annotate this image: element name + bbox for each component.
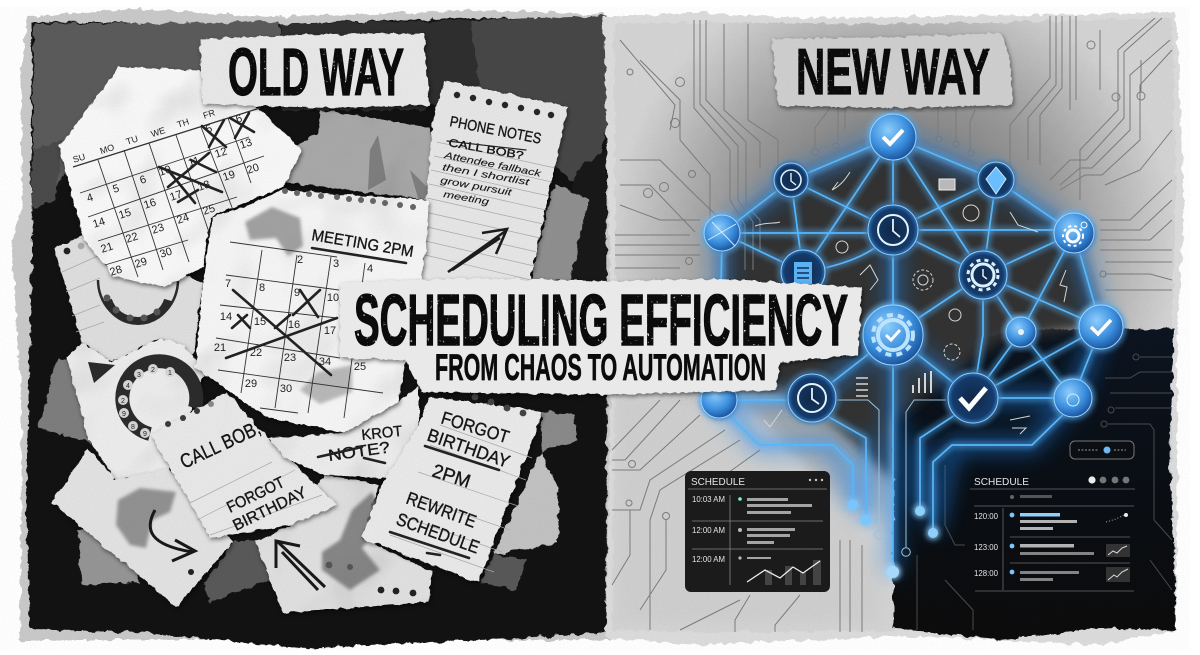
stain (322, 492, 386, 590)
date numbers: 9 (294, 287, 300, 299)
date numbers (85, 112, 261, 279)
schedule card: left (685, 471, 830, 592)
horizon glow line (1100, 326, 1174, 330)
weekday labels: FR (202, 107, 217, 121)
crumpled calendar (59, 67, 302, 287)
rotary dial: 3 (137, 372, 141, 379)
date numbers: 25 (201, 203, 217, 218)
status dots (1088, 476, 1129, 484)
torn grey paper behind notes (276, 110, 455, 283)
date numbers: 15 (254, 316, 266, 328)
date numbers: 5 (111, 182, 121, 196)
date numbers: 7 (225, 278, 231, 290)
date numbers (214, 254, 373, 395)
date numbers: 10 (327, 292, 339, 304)
network edges (719, 137, 1101, 572)
meeting 2pm heading: MEETING 2PM (310, 227, 415, 261)
date numbers: 3 (333, 258, 339, 270)
panel: new way (603, 12, 1184, 645)
call bob text: CALL BOB, (177, 417, 264, 474)
lower left light paper (618, 395, 880, 622)
weekday labels: TH (176, 117, 190, 130)
dark network interior (722, 140, 1105, 480)
date numbers: 2 (297, 254, 303, 266)
2pm text: 2PM (429, 461, 473, 493)
new way heading: NEW WAY (796, 35, 990, 108)
dim circuit leads (837, 400, 946, 548)
grey gradient background (612, 18, 1176, 632)
panel: old way (12, 9, 614, 648)
date numbers: 14 (220, 311, 232, 323)
phone notes page (421, 80, 568, 283)
mini line chart (747, 560, 821, 585)
ruled lines (390, 425, 532, 572)
torn paper rim (12, 9, 614, 640)
time labels: 12:00 AM (692, 525, 725, 535)
time labels: 12:00 AM (692, 554, 725, 564)
date numbers: 15 (117, 207, 133, 222)
rotary dial: 8 (131, 424, 135, 431)
subtitle: FROM CHAOS TO AUTOMATION (435, 347, 766, 388)
cut off forgot text: KROT (361, 423, 403, 444)
binder holes (454, 92, 554, 118)
time labels: 120:00 (974, 511, 998, 521)
date numbers: 14 (91, 216, 107, 231)
circuit traces: below new way label (812, 105, 975, 156)
rotary dial: 4 (126, 383, 130, 390)
date numbers: 16 (288, 319, 300, 331)
node: small globe (1006, 317, 1036, 347)
coffee stain (245, 207, 303, 256)
meeting calendar (195, 188, 429, 433)
rotary dial: 1 (168, 370, 172, 377)
row bars (1020, 495, 1052, 498)
date numbers: 24 (175, 212, 191, 227)
scribbled notes: Attendee fallback (442, 150, 543, 180)
forgot birthday text: BIRTHDAY (230, 484, 310, 535)
date numbers: 4 (85, 191, 95, 205)
rotary dial fragment (98, 280, 178, 323)
weekday labels: TU (125, 134, 139, 147)
time labels: 128:00 (974, 568, 998, 578)
small network icons (755, 172, 1067, 434)
forgot birthday text: FORGOT (439, 408, 512, 447)
date numbers: 23 (150, 222, 166, 237)
date numbers: 28 (108, 264, 124, 279)
node: gear right (1054, 213, 1094, 253)
ruled lines (421, 142, 555, 280)
binder holes (282, 188, 416, 210)
cardboard scraps (38, 183, 589, 602)
scribbled notes: grow pursuit (439, 175, 513, 199)
node: centre clock (868, 205, 918, 255)
binder hole (188, 569, 194, 575)
node: lower check (948, 373, 998, 423)
rotary dial: 9 (143, 431, 147, 438)
date numbers: 34 (319, 356, 331, 368)
rotary dial: 2 (121, 398, 125, 405)
holes (378, 587, 416, 596)
network nodes (701, 114, 1123, 423)
circuit lead lines (719, 405, 853, 503)
date numbers: 12 (213, 146, 229, 161)
node: lower clock (788, 374, 836, 422)
binder holes (165, 408, 200, 427)
date numbers: 11 (187, 155, 201, 170)
date numbers: 23 (284, 352, 296, 364)
date numbers: 17 (168, 189, 184, 204)
date numbers: 6 (138, 173, 148, 187)
forgot birthday note (362, 394, 543, 583)
date numbers: 4 (367, 263, 373, 275)
dividers (970, 489, 1135, 591)
time labels (692, 494, 725, 564)
node: top check (870, 114, 916, 160)
grid lines (73, 108, 264, 277)
weekday labels: WE (150, 125, 167, 139)
rewrite schedule text: SCHEDULE (394, 509, 482, 558)
date numbers: 8 (259, 282, 265, 294)
time labels (974, 511, 998, 578)
node: lower right globe (1054, 379, 1092, 417)
time labels: 123:00 (974, 542, 998, 552)
lower stain (300, 365, 352, 404)
lead terminals (848, 500, 938, 578)
weekday labels (72, 107, 217, 165)
stained note with arrow (52, 448, 233, 607)
dark notch (88, 362, 115, 383)
ruled lines (62, 255, 104, 332)
node: right check (1079, 305, 1123, 349)
stain (116, 488, 176, 548)
dark background paper (26, 18, 607, 648)
rotary dial: 9 (122, 411, 126, 418)
date numbers: 30 (280, 383, 292, 395)
row dots (738, 497, 742, 501)
scribbled notes: then I shortlist (441, 162, 531, 188)
node: gear clock (959, 251, 1007, 299)
filter pill (1070, 441, 1134, 459)
crossed out days (159, 113, 254, 203)
date numbers: 19 (221, 169, 237, 184)
card heading: SCHEDULE (974, 476, 1029, 488)
struck out note: NOTE? (327, 439, 391, 465)
old way heading: OLD WAY (228, 35, 404, 110)
date numbers: 22 (250, 347, 262, 359)
binder holes (472, 394, 526, 416)
paper folds (368, 135, 430, 205)
date numbers: 18 (196, 179, 212, 194)
circuit traces: lower right (917, 354, 1172, 630)
forgot birthday text: FORGOT (224, 474, 288, 517)
node: diamond (978, 162, 1014, 198)
row dots (1010, 513, 1014, 574)
date numbers: 21 (214, 342, 226, 354)
call bob note (151, 392, 337, 538)
circuit traces: upper right (1010, 16, 1172, 290)
date numbers: 20 (245, 162, 261, 177)
scribbled notes: meeting (442, 189, 491, 208)
time labels: 10:03 AM (692, 494, 725, 504)
scribbled notes (439, 150, 543, 208)
weekday labels: SU (72, 151, 87, 165)
phone notes heading: PHONE NOTES (448, 113, 543, 148)
rotary dial: 2 (151, 367, 155, 374)
rotary dial (118, 361, 196, 438)
crumpled grey background sheets (32, 16, 606, 320)
torn paper base (603, 12, 1184, 645)
mini charts (1106, 513, 1130, 582)
date numbers: 6 (234, 112, 244, 126)
struck out note: CALL BOB? (447, 137, 524, 162)
title strip (340, 278, 862, 395)
circuit traces: lower left (612, 400, 862, 632)
circuit traces: upper left (615, 20, 778, 270)
black lower right sheet (893, 328, 1176, 640)
crossed out days (226, 290, 337, 375)
date numbers: 22 (124, 231, 140, 246)
rewrite schedule text: REWRITE (404, 488, 479, 532)
node: document (781, 250, 825, 294)
upward arrow (276, 541, 325, 590)
rotary dial page (67, 338, 205, 480)
date numbers: 29 (245, 378, 257, 390)
node: gear check (863, 305, 923, 365)
grid lines (216, 242, 383, 418)
weekday labels: MO (99, 142, 116, 156)
blue halo behind network (719, 137, 1101, 572)
ruled lines (190, 462, 322, 535)
hand drawn arrow (448, 229, 507, 272)
menu dots (809, 479, 823, 481)
date numbers: 29 (133, 256, 149, 271)
date numbers: 25 (354, 361, 366, 373)
node: clock upper left (774, 163, 808, 197)
date numbers: 13 (238, 137, 254, 152)
node: left globe (704, 215, 740, 251)
date numbers: 21 (99, 241, 115, 256)
curved arrow (150, 510, 195, 561)
forgot birthday text: BIRTHDAY (425, 425, 513, 472)
bottom centre paper (256, 475, 432, 613)
row bars (747, 498, 812, 559)
forgot note paper (268, 385, 419, 482)
rewrite schedule text (394, 488, 482, 558)
date numbers: 16 (142, 197, 158, 212)
date numbers: 5 (204, 122, 214, 136)
node: lower left globe (701, 382, 737, 418)
card heading: SCHEDULE (691, 476, 745, 488)
schedule card: right (970, 441, 1135, 591)
old way label (200, 33, 429, 110)
dividers (688, 489, 827, 585)
date numbers: 17 (324, 325, 336, 337)
struck out note (447, 137, 526, 162)
new way label (772, 33, 1013, 108)
old phone note page (54, 233, 203, 368)
date numbers: 10 (157, 164, 173, 179)
date numbers: 30 (158, 246, 174, 261)
binder holes (64, 243, 84, 254)
